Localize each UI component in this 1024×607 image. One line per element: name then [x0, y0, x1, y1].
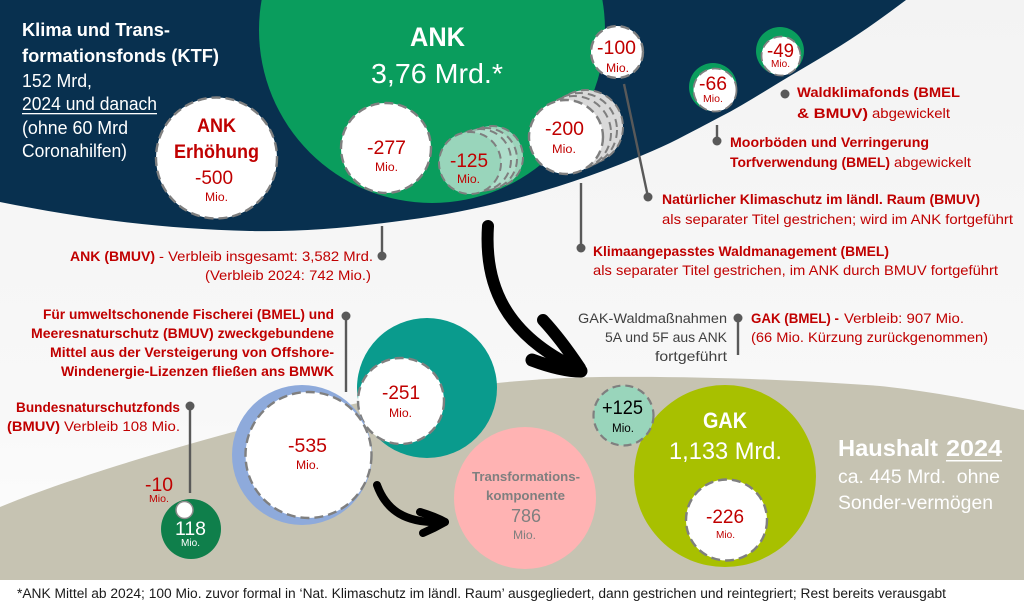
label: Waldklimafonds: & BMUV)	[797, 105, 868, 121]
heading: KTF: Coronahilfen)	[22, 141, 127, 161]
label: GAK BMEL Verbleib	[734, 310, 988, 355]
bubble: -277	[341, 103, 431, 193]
heading: KTF: 152 Mrd,	[22, 71, 92, 91]
label: GAK BMEL Verbleib: (66 Mio. Kürzung zurückgenommen)	[751, 329, 988, 345]
bubble: -10 and 118 Bundesnaturschutzfonds	[145, 475, 221, 559]
bubble: -10 and 118 Bundesnaturschutzfonds: Mio.	[181, 538, 200, 549]
label: Fischerei Meeresnaturschutz: Meeresnaturschutz (BMUV) zweckgebundene	[31, 325, 334, 341]
bubble: -200 stacked: Mio.	[552, 144, 576, 156]
ANK big circle	[259, 0, 605, 203]
bubble: -125 stacked	[439, 126, 523, 194]
bubble: -277: -277	[367, 138, 406, 159]
heading: Haushalt 2024	[838, 435, 1002, 514]
label: Bundesnaturschutzfonds: Bundesnaturschutzfonds	[16, 399, 180, 415]
bubble: -200 stacked: -200	[545, 119, 584, 140]
bubble: GAK	[634, 385, 816, 567]
label: Fischerei Meeresnaturschutz: Windenergie-Lizenzen fließen ans BMWK	[61, 363, 334, 379]
bubble: -10 and 118 Bundesnaturschutzfonds: Mio.	[149, 494, 169, 505]
bubble: -125 stacked: Mio.	[457, 174, 480, 186]
heading: Haushalt 2024: Sonder-vermögen	[838, 493, 993, 514]
label: GAK-Waldmaßnahmen: fortgeführt	[655, 348, 727, 364]
heading: Haushalt 2024: Haushalt	[838, 435, 938, 461]
bubble: ANK Erhöhung	[156, 98, 277, 218]
bubble: -66: Mio.	[703, 94, 723, 105]
label: Moorböden: abgewickelt	[894, 154, 971, 170]
bubble: -49	[756, 27, 804, 76]
bubble: -66: -66	[699, 74, 727, 95]
bubble: -251 teal: -251	[382, 383, 420, 404]
label: ANK BMUV Verbleib: - Verbleib insgesamt: 3,582 Mrd.	[159, 248, 373, 264]
bubble: -49: Mio.	[771, 59, 790, 70]
label: GAK BMEL Verbleib: Verbleib: 907 Mio.	[844, 310, 964, 326]
bubble: -125 stacked: -125	[450, 151, 488, 172]
heading: KTF	[22, 19, 219, 161]
bubble: -251 teal: Mio.	[389, 408, 412, 420]
label: Bundesnaturschutzfonds: (BMUV)	[7, 418, 60, 434]
bubble: ANK Erhöhung: -500	[195, 168, 233, 189]
bubble: Transformationskomponente	[454, 427, 596, 569]
label: GAK-Waldmaßnahmen	[578, 310, 728, 364]
label: ANK BMUV Verbleib: (Verbleib 2024: 742 Mio.)	[205, 267, 371, 283]
bubble: ANK Erhöhung: Mio.	[205, 192, 228, 204]
bubble: Transformationskomponente: Transformations-	[472, 469, 580, 484]
bubble: Transformationskomponente: Mio.	[513, 528, 536, 542]
bubble: -226	[686, 480, 767, 560]
bubble: -200 stacked	[529, 90, 623, 174]
heading: KTF: formationsfonds (KTF)	[22, 45, 219, 66]
bubble: -535 blue	[232, 385, 372, 525]
label: GAK-Waldmaßnahmen: GAK-Waldmaßnahmen	[578, 310, 727, 326]
label: Natürlicher Klimaschutz	[624, 84, 1013, 227]
bubble: -277: Mio.	[375, 162, 398, 174]
bubble: -10 and 118 Bundesnaturschutzfonds: 118	[175, 519, 206, 540]
bubble: +125: +125	[602, 398, 643, 419]
bubble: -535 blue: -535	[288, 436, 327, 457]
bubble: -100: Mio.	[606, 63, 629, 75]
label: ANK BMUV Verbleib: ANK (BMUV)	[70, 248, 155, 264]
bubble: -66	[689, 63, 737, 112]
heading: Haushalt 2024: 2024	[946, 435, 1002, 461]
label: Moorböden: Torfverwendung (BMEL)	[730, 154, 890, 170]
label: Waldklimafonds: Waldklimafonds (BMEL	[797, 84, 960, 100]
label: Fischerei Meeresnaturschutz	[31, 306, 350, 392]
bubble: GAK: GAK	[703, 408, 747, 433]
label: Bundesnaturschutzfonds: Verbleib 108 Mio.	[64, 418, 180, 434]
bubble: -226: -226	[706, 507, 744, 528]
bubble: ANK Erhöhung: ANK	[197, 116, 236, 137]
label: GAK-Waldmaßnahmen: 5A und 5F aus ANK	[605, 329, 728, 345]
label: Moorböden	[712, 125, 971, 170]
heading: ANK 3,76 Mrd: 3,76 Mrd.*	[371, 58, 503, 89]
bubble: Transformationskomponente: 786	[511, 506, 541, 526]
label: GAK BMEL Verbleib: GAK (BMEL) -	[751, 310, 839, 326]
label: ANK BMUV Verbleib	[70, 226, 386, 283]
heading: KTF: (ohne 60 Mrd	[22, 118, 128, 138]
bubble: -10 and 118 Bundesnaturschutzfonds: -10	[145, 475, 173, 496]
label: Natürlicher Klimaschutz: Natürlicher Klimaschutz im ländl. Raum (BMUV)	[662, 191, 980, 207]
heading: KTF: 2024 und danach	[22, 94, 157, 114]
bubble: ANK Erhöhung: Erhöhung	[174, 142, 259, 163]
arrow: -535 to Transformationskomponente	[377, 485, 445, 533]
label: Waldklimafonds	[780, 84, 960, 121]
bubble: GAK: 1,133 Mrd.	[669, 438, 782, 465]
heading: KTF: Klima und Trans-	[22, 19, 170, 40]
heading: ANK 3,76 Mrd	[371, 22, 503, 89]
panel: KTF navy background	[0, 0, 906, 231]
label: Klimaangepasstes Waldmanagement: als separater Titel gestrichen, im ANK durch BMUV fortgeführt	[593, 262, 998, 278]
footnote: *ANK Mittel ab 2024; 100 Mio. zuvor formal in ‘Nat. Klimaschutz im ländl. Raum’ ausgegliedert, dann gestrichen und reintegriert; Rest bereits verausgabt	[17, 586, 946, 601]
label: Fischerei Meeresnaturschutz: Mittel aus der Versteigerung von Offshore-	[50, 344, 334, 360]
label: Fischerei Meeresnaturschutz: Für umweltschonende Fischerei (BMEL) und	[43, 306, 334, 322]
bubble: -251 teal	[357, 318, 497, 458]
bubble: -535 blue: Mio.	[296, 460, 319, 472]
label: Moorböden: Moorböden und Verringerung	[730, 134, 929, 150]
bubble: -100: -100	[597, 38, 636, 59]
label: Bundesnaturschutzfonds	[7, 399, 194, 493]
bubble: -100	[591, 26, 643, 78]
heading: Haushalt 2024: ca. 445 Mrd. ohne	[838, 467, 1000, 488]
bubble: -49: -49	[767, 41, 794, 62]
bubble: -226: Mio.	[716, 529, 735, 541]
label: Natürlicher Klimaschutz: als separater Titel gestrichen; wird im ANK fortgeführt	[662, 211, 1013, 227]
label: Klimaangepasstes Waldmanagement: Klimaangepasstes Waldmanagement (BMEL)	[593, 243, 889, 259]
bubble: Transformationskomponente: komponente	[486, 488, 565, 503]
label: Waldklimafonds: abgewickelt	[872, 105, 950, 121]
label: Klimaangepasstes Waldmanagement	[576, 183, 998, 278]
panel: Haushalt tan background	[0, 377, 1024, 580]
heading: ANK 3,76 Mrd: ANK	[410, 22, 465, 52]
arrow: ANK to GAK	[488, 226, 581, 371]
bubble: +125: Mio.	[612, 423, 634, 435]
bubble: +125	[594, 386, 654, 446]
